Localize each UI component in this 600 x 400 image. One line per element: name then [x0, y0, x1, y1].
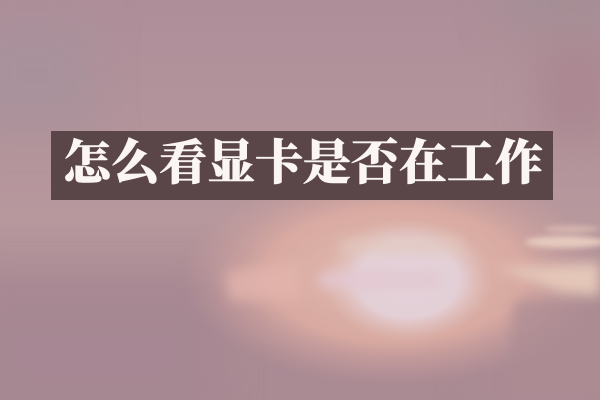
title banner [51, 131, 553, 200]
title text: 怎么看显卡是否在工作 [63, 137, 543, 190]
sun glow [180, 163, 600, 387]
